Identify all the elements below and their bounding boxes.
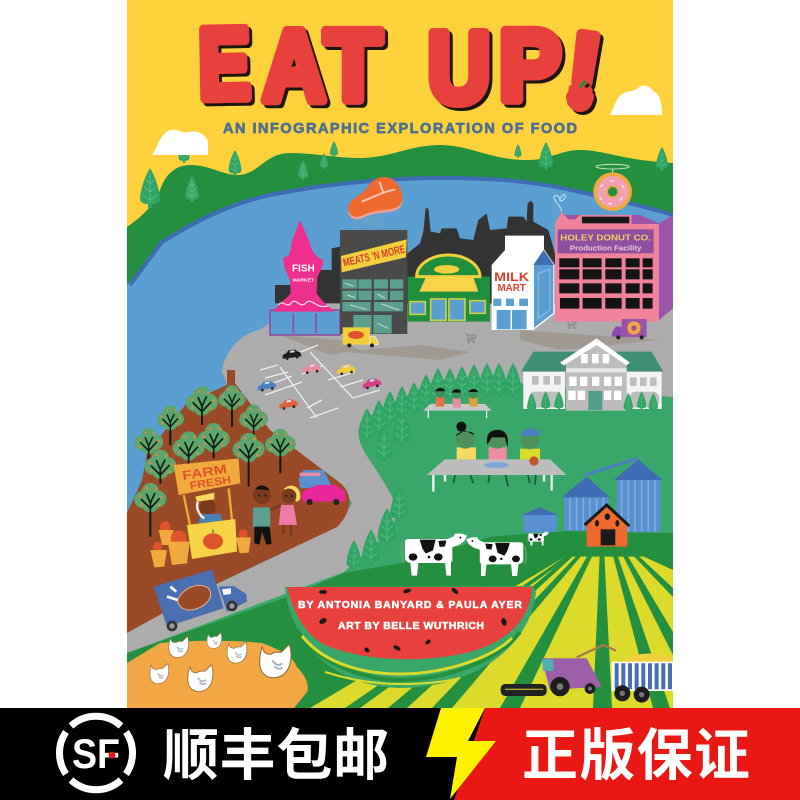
parked cars	[257, 319, 577, 411]
donut factory: Production Facility	[570, 246, 642, 253]
icon: SF logo: SF	[72, 730, 120, 777]
donut factory	[554, 195, 673, 322]
milk carton building: MILK	[494, 270, 530, 284]
title: U	[428, 11, 490, 123]
illustrator credit: ART BY BELLE WUTHRICH	[338, 620, 484, 632]
title: T	[325, 11, 381, 122]
forest near the mill	[346, 363, 522, 570]
silos	[522, 458, 663, 532]
farm stand	[174, 458, 240, 559]
orange chicken yard	[127, 641, 308, 708]
banner: free shipping	[0, 708, 800, 800]
milk carton building	[492, 236, 554, 330]
combine harvester	[501, 645, 616, 696]
yellow meat van	[343, 327, 378, 347]
banner: red panel	[454, 708, 800, 800]
author credit: BY ANTONIA BANYARD & PAULA AYER	[298, 599, 522, 611]
mill building	[521, 338, 663, 411]
parked cars by the stand	[299, 470, 345, 505]
donut sign	[593, 172, 632, 211]
parking lines	[260, 345, 380, 418]
building shadows on lot	[280, 330, 660, 360]
turkey truck	[154, 569, 247, 631]
people at large table	[427, 422, 567, 492]
title: A	[263, 9, 325, 121]
book cover background	[127, 0, 673, 708]
hill strip behind barn	[490, 531, 673, 557]
watermelon	[285, 586, 536, 688]
farm stand: FRESH	[189, 474, 232, 492]
orchard and farm stand	[134, 385, 345, 631]
subtitle: AN INFOGRAPHIC EXPLORATION OF FOOD	[223, 121, 577, 137]
fish market: MARKET	[293, 278, 314, 284]
man customer	[253, 486, 281, 545]
skyline	[275, 201, 555, 303]
fish market: FISH	[292, 264, 315, 275]
steak sign	[348, 177, 402, 219]
banner text: free SF shipping: 顺丰包邮	[163, 724, 389, 787]
grocery store	[408, 255, 490, 322]
donut van	[612, 319, 647, 339]
trees in front of mill	[527, 391, 658, 412]
meats and more building	[340, 218, 407, 334]
icon: apple on title	[566, 81, 594, 112]
apple trees	[134, 385, 296, 537]
clouds	[152, 85, 662, 155]
icon: SF logo	[59, 716, 133, 790]
city buildings	[270, 164, 673, 418]
woman customer	[279, 486, 300, 536]
donut sign halo	[596, 164, 629, 173]
title: !	[559, 12, 608, 127]
donut factory: HOLEY DONUT CO.	[560, 233, 651, 243]
grain trailer	[612, 653, 675, 703]
light green land	[127, 380, 673, 653]
fish market	[270, 220, 340, 335]
icon: lightning bolt	[426, 708, 496, 799]
crop field	[310, 548, 673, 708]
meats and more building: MEATS 'N MORE	[342, 244, 407, 270]
title: P	[499, 11, 561, 122]
banner text: genuine guarantee: 正版保证	[522, 724, 750, 787]
brown orchard field	[127, 370, 349, 633]
milk carton building: MART	[497, 283, 526, 294]
grey parking lot and road	[127, 300, 673, 653]
field stripes	[345, 548, 673, 708]
river	[127, 178, 673, 520]
farm stand: FARM	[181, 462, 228, 483]
chickens	[150, 633, 291, 692]
cows	[402, 532, 549, 576]
barn	[585, 505, 629, 547]
background hills	[127, 145, 673, 285]
title	[197, 8, 608, 127]
trees on the hills	[140, 141, 668, 208]
river dark edge	[130, 178, 673, 285]
dark green meadow	[127, 532, 673, 708]
cover illustration	[127, 8, 675, 708]
title: E	[197, 8, 251, 121]
small picnic table	[423, 388, 492, 418]
farm people, silos, barn, cows	[402, 422, 675, 703]
baskets	[150, 521, 251, 567]
